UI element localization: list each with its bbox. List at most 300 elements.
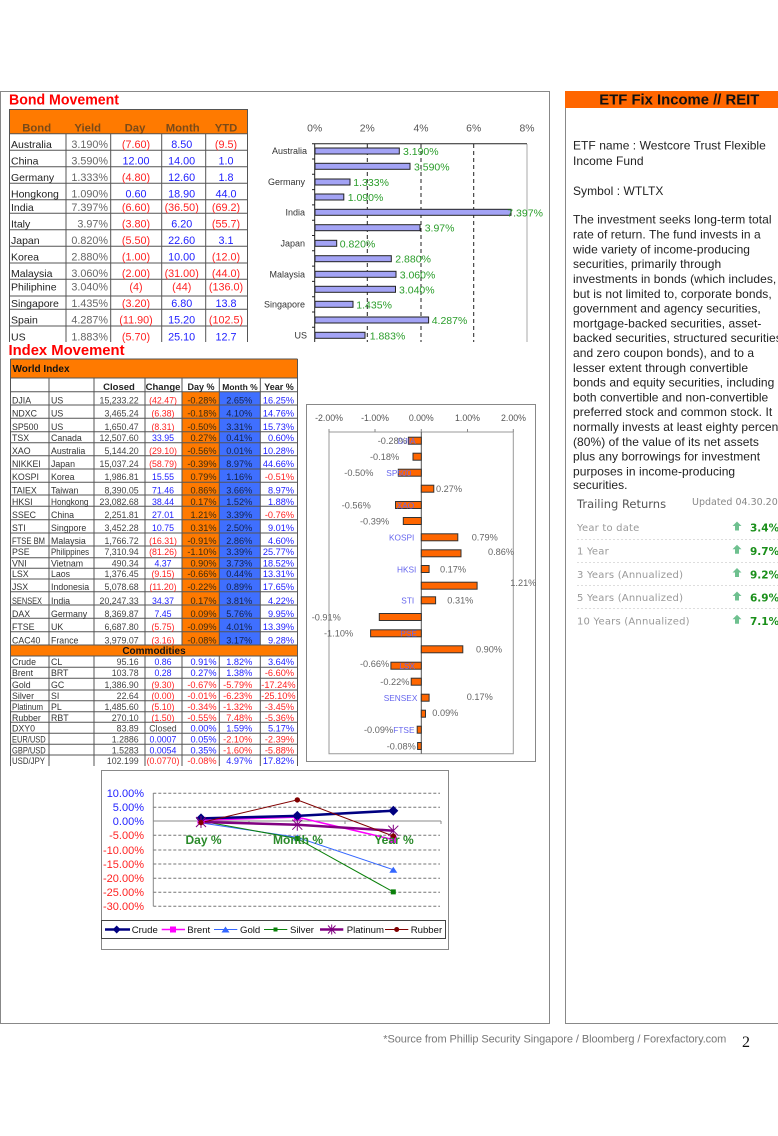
table: world index and commodities: 3.39% bbox=[226, 547, 252, 557]
text block: ETF description: investments in bonds (which includes, bbox=[573, 272, 776, 286]
chart: index day change bar chart: -0.22% bbox=[380, 677, 409, 687]
table: world index and commodities: 1,986.81 bbox=[104, 472, 139, 482]
table: world index and commodities: -1.32% bbox=[223, 702, 252, 712]
chart: bond yields bar chart: 2% bbox=[360, 124, 375, 134]
table: world index and commodities: 0.44% bbox=[226, 569, 252, 579]
table: world index and commodities: (11.20) bbox=[149, 582, 177, 592]
table: world index and commodities: Germany bbox=[51, 609, 88, 619]
table: bond movement: (2.00) bbox=[122, 268, 150, 280]
table: world index and commodities: 3.39% bbox=[226, 510, 252, 520]
table: world index and commodities: 0.17% bbox=[190, 596, 216, 606]
chart: index day change bar chart: -0.50% bbox=[344, 468, 373, 478]
table: world index and commodities: 4.60% bbox=[268, 536, 294, 546]
table: world index and commodities: World Index bbox=[12, 364, 70, 375]
table: world index and commodities: Month % bbox=[222, 382, 258, 392]
table: bond movement: 3.97% bbox=[77, 219, 108, 231]
table: world index and commodities: 18.52% bbox=[263, 558, 294, 568]
table: world index and commodities: (0.00) bbox=[152, 691, 175, 701]
table: world index and commodities: -0.55% bbox=[187, 713, 216, 723]
table: world index and commodities: 1.5283 bbox=[112, 746, 139, 756]
table: world index and commodities: (1.50) bbox=[152, 713, 175, 723]
text block: ETF description: plus any borrowings for investment bbox=[573, 450, 761, 464]
table: world index and commodities: 27.01 bbox=[152, 510, 174, 520]
table: world index and commodities: (16.31) bbox=[149, 536, 177, 546]
table: bond movement: (36.50) bbox=[165, 202, 199, 214]
chart: commodities line chart: -10.00% bbox=[103, 845, 144, 857]
table: bond movement: 3.1 bbox=[218, 235, 234, 247]
table: bond movement: (31.00) bbox=[165, 268, 199, 280]
table: bond movement: (9.5) bbox=[215, 139, 237, 151]
table: world index and commodities: -0.76% bbox=[265, 510, 294, 520]
table: world index and commodities: (42.47) bbox=[149, 396, 177, 406]
table: world index and commodities: 7.45 bbox=[154, 609, 172, 619]
table: world index and commodities: Malaysia bbox=[51, 536, 86, 546]
table: bond movement: 25.10 bbox=[168, 331, 195, 343]
chart: commodities line chart: Year % bbox=[374, 833, 414, 847]
table: bond movement: Malaysia bbox=[11, 268, 53, 280]
table: world index and commodities: CL bbox=[51, 657, 62, 667]
heading: Index Movement: Index Movement bbox=[8, 342, 124, 359]
text block: ETF description: lesser extent through convertible bbox=[573, 361, 748, 375]
table: world index and commodities: (58.79) bbox=[149, 459, 177, 469]
table: world index and commodities: Gold bbox=[12, 680, 31, 690]
table: world index and commodities: 1,386.90 bbox=[104, 680, 139, 690]
table: world index and commodities: Rubber bbox=[12, 713, 41, 723]
text block: ETF description: securities, primarily through bbox=[573, 257, 721, 271]
table: bond movement: India bbox=[11, 202, 34, 214]
table: world index and commodities: 3.64% bbox=[268, 657, 294, 667]
text block: ETF description: wide variety of income-producing bbox=[572, 242, 750, 256]
text block: ETF description: Symbol : WTLTX bbox=[573, 184, 664, 198]
table: bond movement: 1.090% bbox=[71, 188, 108, 200]
table: world index and commodities: 15.73% bbox=[263, 422, 294, 432]
table: bond movement: 12.60 bbox=[168, 172, 195, 184]
table: world index and commodities: SSEC bbox=[12, 510, 37, 520]
table: world index and commodities: VNI bbox=[12, 558, 27, 568]
table: bond movement: 14.00 bbox=[168, 156, 195, 168]
table: world index and commodities: (5.75) bbox=[152, 622, 175, 632]
table: world index and commodities: (6.38) bbox=[152, 408, 175, 418]
table: world index and commodities: 2.65% bbox=[226, 396, 252, 406]
legend: commodity series: Brent bbox=[187, 925, 211, 936]
table: world index and commodities: Hongkong bbox=[51, 497, 89, 507]
table: world index and commodities: 8,369.87 bbox=[104, 609, 139, 619]
table: world index and commodities: China bbox=[51, 510, 74, 520]
table: world index and commodities: 0.09% bbox=[190, 609, 216, 619]
chart: index day change bar chart: STI bbox=[401, 596, 414, 606]
table: world index and commodities: 33.95 bbox=[152, 433, 174, 443]
table: world index and commodities: FTSE bbox=[12, 622, 35, 632]
table: bond movement: Philiphine bbox=[11, 282, 57, 294]
table: world index and commodities: 1.52% bbox=[226, 497, 252, 507]
table: world index and commodities: 9.01% bbox=[268, 523, 294, 533]
table: world index and commodities: 1,766.72 bbox=[104, 536, 139, 546]
table: world index and commodities: 1.59% bbox=[226, 724, 252, 734]
table: bond movement: (44.0) bbox=[212, 268, 240, 280]
table: world index and commodities: -6.60% bbox=[265, 668, 294, 678]
table: bond movement: 2.880% bbox=[71, 251, 108, 263]
table: bond movement: 1.333% bbox=[71, 172, 108, 184]
table: world index and commodities: -0.67% bbox=[187, 680, 216, 690]
chart: bond yields bar chart: 8% bbox=[519, 124, 535, 134]
table: bond movement: (5.70) bbox=[122, 331, 150, 343]
table: world index and commodities: -1.60% bbox=[223, 746, 252, 756]
table: trailing returns: 3 Years (Annualized) bbox=[577, 570, 683, 581]
chart: bond yields bar chart: 3.060% bbox=[400, 269, 435, 281]
text block: ETF description: ETF name : Westcore Trust Flexible bbox=[573, 138, 766, 152]
table: world index and commodities: 2,251.81 bbox=[104, 510, 139, 520]
text block: ETF description: both convertible and non-convertible bbox=[573, 390, 769, 404]
footer: source note: *Source from Phillip Security Singapore / Bloomberg / Forexfactory.com bbox=[383, 1034, 726, 1046]
table: bond movement: (69.2) bbox=[212, 202, 240, 214]
table: world index and commodities: 0.27% bbox=[190, 433, 216, 443]
table: world index and commodities: 38.44 bbox=[152, 497, 174, 507]
table: world index and commodities: -0.56% bbox=[187, 446, 216, 456]
table: world index and commodities: 25.77% bbox=[263, 547, 294, 557]
table: bond movement: (3.80) bbox=[122, 219, 150, 231]
table: bond movement: Singapore bbox=[11, 298, 59, 310]
table: bond movement: (55.7) bbox=[212, 219, 240, 231]
table: world index and commodities: (9.30) bbox=[152, 680, 175, 690]
chart: bond yields bar chart: 3.040% bbox=[399, 284, 435, 296]
table: world index and commodities: 5.76% bbox=[226, 609, 252, 619]
table: world index and commodities: 9.95% bbox=[268, 609, 294, 619]
table: world index and commodities: 9.28% bbox=[268, 636, 294, 646]
chart: index day change bar chart: SP500 bbox=[386, 468, 412, 478]
table: bond movement: 6.20 bbox=[171, 219, 192, 231]
table: world index and commodities: Vietnam bbox=[51, 558, 83, 568]
table: world index and commodities: Philippines bbox=[51, 547, 90, 557]
table: world index and commodities: NIKKEI bbox=[12, 459, 41, 469]
table: world index and commodities: -2.39% bbox=[265, 734, 294, 744]
table: world index and commodities: 1,376.45 bbox=[104, 569, 139, 579]
heading: ETF Fix Income // REIT bbox=[565, 91, 778, 108]
table: world index and commodities: -1.10% bbox=[187, 547, 216, 557]
table: world index and commodities: (0.0770) bbox=[147, 756, 179, 766]
table: world index and commodities: 7,310.94 bbox=[104, 547, 139, 557]
table: world index and commodities: Year % bbox=[264, 382, 294, 392]
chart: index day change bar chart: 0.31% bbox=[447, 596, 473, 606]
chart: bond yields bar chart bbox=[264, 124, 543, 342]
legend: commodity series bbox=[102, 920, 446, 938]
table: world index and commodities: 0.31% bbox=[190, 523, 216, 533]
table: world index and commodities: 490.34 bbox=[112, 558, 139, 568]
chart: bond yields bar chart: 0% bbox=[307, 124, 322, 134]
table: world index and commodities: 10.75 bbox=[152, 523, 174, 533]
table: bond movement: Japan bbox=[11, 235, 40, 247]
table: world index and commodities: PL bbox=[51, 702, 62, 712]
chart: index day change bar chart: -0.56% bbox=[342, 500, 371, 510]
table: bond movement: Australia bbox=[11, 139, 52, 151]
chart: index day change bar chart: 0.90% bbox=[476, 645, 502, 655]
table: world index and commodities: US bbox=[51, 408, 63, 418]
table: world index and commodities: 1.16% bbox=[226, 472, 252, 482]
chart: index day change bar chart: -0.09% bbox=[364, 725, 393, 735]
chart: index day change bar chart: KOSPI bbox=[389, 533, 414, 543]
text block: ETF description: normally invests at least eighty percent bbox=[573, 420, 778, 434]
table: world index and commodities: 1.38% bbox=[226, 668, 252, 678]
chart: commodities line chart: 0.00% bbox=[113, 816, 144, 828]
chart: bond yields bar chart: US bbox=[294, 330, 307, 340]
table: world index and commodities: 0.79% bbox=[190, 472, 216, 482]
chart: commodities line chart: 5.00% bbox=[113, 802, 144, 814]
chart: index day change bar chart: -2.00% bbox=[315, 413, 343, 423]
table: world index and commodities: 23,082.68 bbox=[100, 497, 139, 507]
table: world index and commodities: 102.199 bbox=[107, 756, 139, 766]
table: bond movement: Day bbox=[125, 122, 146, 134]
table: world index and commodities: Korea bbox=[51, 472, 75, 482]
table: world index and commodities: -0.09% bbox=[187, 622, 216, 632]
table: world index and commodities: Closed bbox=[103, 382, 135, 393]
table: world index and commodities: 0.35% bbox=[190, 746, 216, 756]
table: bond movement: Korea bbox=[11, 251, 39, 263]
chart: bond yields bar chart: 3.190% bbox=[403, 146, 439, 158]
table: world index and commodities: 13.39% bbox=[263, 622, 294, 632]
table: world index and commodities: DXY0 bbox=[12, 724, 35, 734]
chart: bond yields bar chart: 0.820% bbox=[340, 238, 375, 250]
table: world index and commodities: -0.66% bbox=[187, 569, 216, 579]
table: bond movement: 22.60 bbox=[168, 235, 195, 247]
table: world index and commodities: Crude bbox=[12, 657, 36, 667]
table: world index and commodities: (29.10) bbox=[149, 446, 177, 456]
table: world index and commodities: 17.65% bbox=[263, 582, 294, 592]
table: bond movement: (4.80) bbox=[122, 172, 150, 184]
table: bond movement: 12.7 bbox=[215, 331, 237, 343]
table: world index and commodities: DJIA bbox=[12, 396, 31, 406]
table: bond movement: Month bbox=[166, 122, 200, 134]
chart: bond yields bar chart: 3.590% bbox=[414, 161, 450, 173]
table: bond movement: (44) bbox=[172, 282, 191, 294]
table: trailing returns: Year to date bbox=[576, 523, 640, 534]
table: world index and commodities: 95.16 bbox=[117, 657, 139, 667]
table: world index and commodities: 4.97% bbox=[226, 756, 252, 766]
table: world index and commodities: 1.2886 bbox=[112, 734, 139, 744]
table: bond movement: 3.190% bbox=[71, 139, 108, 151]
chart: index day change bar chart: FTSE bbox=[393, 725, 415, 735]
chart: bond yields bar chart: 1.435% bbox=[356, 299, 392, 311]
chart: bond yields bar chart: Australia bbox=[272, 146, 307, 156]
text block: ETF description: and zero coupon bonds), and to a bbox=[573, 346, 754, 360]
table: world index and commodities: 0.90% bbox=[190, 558, 216, 568]
chart: bond yields bar chart: 2.880% bbox=[395, 254, 431, 266]
text block: ETF description: purposes in income-producing bbox=[573, 464, 735, 478]
table: world index and commodities: 3.66% bbox=[226, 486, 252, 496]
table: world index and commodities: 2.86% bbox=[226, 536, 252, 546]
table: bond movement: 0.820% bbox=[71, 235, 108, 247]
chart: index day change bar chart: 1.00% bbox=[455, 413, 480, 423]
table: world index and commodities: XAO bbox=[12, 446, 31, 456]
table: world index and commodities: -0.50% bbox=[187, 422, 216, 432]
chart: bond yields bar chart: 6% bbox=[466, 124, 481, 134]
table: world index and commodities: 0.28 bbox=[154, 668, 172, 678]
chart: commodities line chart: Month % bbox=[273, 833, 323, 847]
legend: commodity series: Silver bbox=[290, 925, 315, 936]
chart: index day change bar chart: -0.28% bbox=[378, 436, 407, 446]
chart: index day change bar chart: -0.66% bbox=[360, 659, 389, 669]
table: world index and commodities: (81.26) bbox=[149, 547, 177, 557]
table: world index and commodities: 0.27% bbox=[190, 668, 216, 678]
table: world index and commodities: DAX bbox=[12, 609, 30, 619]
chart: index day change bar chart: -0.08% bbox=[387, 741, 416, 751]
table: world index and commodities: -0.91% bbox=[187, 536, 216, 546]
chart: index day change bar chart: 0.09% bbox=[432, 708, 458, 718]
table: bond movement: 1.435% bbox=[71, 298, 108, 310]
panel: market data bbox=[0, 92, 550, 1024]
table: world index and commodities: 3,979.07 bbox=[104, 636, 139, 646]
table: world index and commodities: 22.64 bbox=[117, 691, 139, 701]
table: world index and commodities: 0.86 bbox=[154, 657, 172, 667]
table: world index and commodities: 0.17% bbox=[190, 497, 216, 507]
table: world index and commodities: RBT bbox=[51, 713, 69, 723]
table: world index and commodities: 4.22% bbox=[268, 596, 294, 606]
table: bond movement: 7.397% bbox=[71, 202, 108, 214]
table: world index and commodities: 1,485.60 bbox=[104, 702, 139, 712]
table: trailing returns bbox=[576, 497, 778, 628]
table: world index and commodities: 270.10 bbox=[112, 713, 139, 723]
table: bond movement: 18.90 bbox=[168, 188, 195, 200]
table: bond movement: Germany bbox=[11, 172, 55, 184]
text block: ETF description: rate of return. The fund invests in a bbox=[573, 228, 761, 242]
table: world index and commodities: 17.82% bbox=[263, 756, 294, 766]
chart: index day change bar chart: 0.79% bbox=[472, 533, 498, 543]
table: world index and commodities: 0.0007 bbox=[150, 734, 177, 744]
table: world index and commodities: Commodities bbox=[122, 646, 186, 657]
table: bond movement: Hongkong bbox=[11, 188, 59, 200]
chart: index day change bar chart: 0.17% bbox=[467, 692, 493, 702]
table: bond movement: Yield bbox=[74, 122, 101, 134]
text block: ETF description: but is not limited to, corporate bonds, bbox=[573, 287, 772, 301]
table: world index and commodities: 0.00% bbox=[190, 724, 216, 734]
table: world index and commodities: USD/JPY bbox=[12, 756, 45, 766]
chart: bond yields bar chart: Japan bbox=[280, 238, 305, 248]
table: world index and commodities: US bbox=[51, 422, 63, 432]
chart: bond yields bar chart: 4% bbox=[413, 124, 429, 134]
table: world index and commodities: 1.82% bbox=[226, 657, 252, 667]
table: bond movement: (7.60) bbox=[122, 139, 150, 151]
table: world index and commodities: Brent bbox=[12, 668, 34, 678]
table: bond movement: 1.8 bbox=[218, 172, 234, 184]
text block: ETF description bbox=[572, 138, 778, 492]
chart: index day change bar chart: 0.86% bbox=[488, 547, 514, 557]
table: bond movement: (102.5) bbox=[209, 315, 243, 327]
chart: index day change bar chart: PSE bbox=[400, 629, 417, 639]
table: world index and commodities: 3,465.24 bbox=[104, 408, 139, 418]
table: world index and commodities: India bbox=[51, 596, 70, 606]
table: world index and commodities: 12,507.60 bbox=[100, 433, 139, 443]
table: world index and commodities: US bbox=[51, 396, 63, 406]
table: world index and commodities: -0.01% bbox=[187, 691, 216, 701]
table: world index and commodities bbox=[10, 359, 298, 766]
table: world index and commodities: 0.0054 bbox=[150, 746, 177, 756]
table: world index and commodities: 83.89 bbox=[117, 724, 139, 734]
chart: bond yields bar chart: 7.397% bbox=[507, 207, 543, 219]
table: world index and commodities: Silver bbox=[12, 691, 34, 701]
chart: index day change bar chart: SENSEX bbox=[384, 693, 418, 703]
table: bond movement: Spain bbox=[11, 315, 38, 327]
chart: commodities line chart bbox=[102, 770, 448, 950]
table: world index and commodities: 3.81% bbox=[226, 596, 252, 606]
table: world index and commodities: 0.60% bbox=[268, 433, 294, 443]
table: bond movement: (4) bbox=[129, 282, 143, 294]
table: world index and commodities: -0.22% bbox=[187, 582, 216, 592]
table: world index and commodities: Singpore bbox=[51, 523, 86, 533]
legend: commodity series: Gold bbox=[240, 925, 260, 936]
table: bond movement: (3.20) bbox=[122, 298, 150, 310]
table: world index and commodities: TSX bbox=[12, 433, 29, 443]
table: world index and commodities: 15,037.24 bbox=[100, 459, 139, 469]
table: world index and commodities: Laos bbox=[51, 569, 71, 579]
table: trailing returns: 1 Year bbox=[577, 546, 610, 558]
table: world index and commodities: 16.25% bbox=[263, 396, 294, 406]
table: world index and commodities: 1,650.47 bbox=[104, 422, 139, 432]
chart: commodities line chart: -20.00% bbox=[103, 873, 144, 885]
table: world index and commodities: GBP/USD bbox=[12, 746, 46, 756]
table: bond movement: 3.040% bbox=[71, 282, 108, 294]
chart: bond yields bar chart: Singapore bbox=[264, 300, 305, 310]
table: bond movement: 4.287% bbox=[71, 315, 108, 327]
table: world index and commodities: (5.10) bbox=[152, 702, 175, 712]
table: bond movement: 15.20 bbox=[168, 315, 195, 327]
table: world index and commodities: 15,233.22 bbox=[100, 396, 139, 406]
table: world index and commodities: 5,078.68 bbox=[104, 582, 139, 592]
table: world index and commodities: -0.34% bbox=[187, 702, 216, 712]
table: bond movement: 3.060% bbox=[71, 268, 108, 280]
table: world index and commodities: 1.21% bbox=[190, 510, 216, 520]
table: world index and commodities: SI bbox=[51, 691, 59, 701]
table: world index and commodities: -2.10% bbox=[223, 734, 252, 744]
table: world index and commodities: -5.36% bbox=[265, 713, 294, 723]
text block: ETF description: preferred stock and common stock. It bbox=[573, 405, 773, 419]
table: trailing returns: Trailing Returns bbox=[576, 497, 666, 511]
chart: bond yields bar chart: Malaysia bbox=[269, 270, 305, 280]
table: bond movement: Italy bbox=[11, 219, 31, 231]
table: world index and commodities: (8.31) bbox=[152, 422, 175, 432]
table: world index and commodities: Closed bbox=[149, 724, 177, 734]
table: world index and commodities: 4.10% bbox=[226, 408, 252, 418]
table: world index and commodities: 3.31% bbox=[226, 422, 252, 432]
table: world index and commodities: CAC40 bbox=[12, 636, 40, 646]
legend: commodity series: Rubber bbox=[411, 925, 443, 936]
chart: index day change bar chart: 0.27% bbox=[436, 484, 462, 494]
table: world index and commodities: 0.05% bbox=[190, 734, 216, 744]
chart: bond yields bar chart: India bbox=[285, 208, 305, 218]
table: bond movement: (1.00) bbox=[122, 251, 150, 263]
chart: index day change bar chart: DJIA bbox=[398, 436, 416, 446]
legend: commodity series: Platinum bbox=[347, 925, 384, 936]
table: bond movement: 12.00 bbox=[122, 156, 150, 168]
page number: 2 bbox=[742, 1034, 750, 1051]
chart: index day change bar chart: HKSI bbox=[397, 564, 416, 574]
table: world index and commodities: SENSEX bbox=[12, 596, 42, 606]
table: world index and commodities: -0.51% bbox=[265, 472, 294, 482]
table: world index and commodities: 4.01% bbox=[226, 622, 252, 632]
table: world index and commodities: -0.08% bbox=[187, 636, 216, 646]
table: bond movement: 1.883% bbox=[71, 331, 108, 343]
table: world index and commodities: FTSE BM bbox=[12, 536, 45, 546]
table: world index and commodities: -25.10% bbox=[261, 691, 296, 701]
table: world index and commodities: Canada bbox=[51, 433, 82, 443]
panel: ETF fix income bbox=[565, 91, 778, 1024]
table: world index and commodities: 5,144.20 bbox=[104, 446, 139, 456]
table: bond movement: 8.50 bbox=[171, 139, 192, 151]
table: bond movement bbox=[9, 109, 248, 343]
chart: index day change bar chart bbox=[306, 404, 536, 762]
chart: commodities line chart: 10.00% bbox=[107, 788, 144, 800]
table: world index and commodities: -17.24% bbox=[261, 680, 296, 690]
text block: ETF description: bonds and equity securities, including bbox=[573, 376, 774, 390]
table: world index and commodities: HKSI bbox=[12, 497, 33, 507]
chart: commodities line chart: -25.00% bbox=[103, 887, 144, 899]
